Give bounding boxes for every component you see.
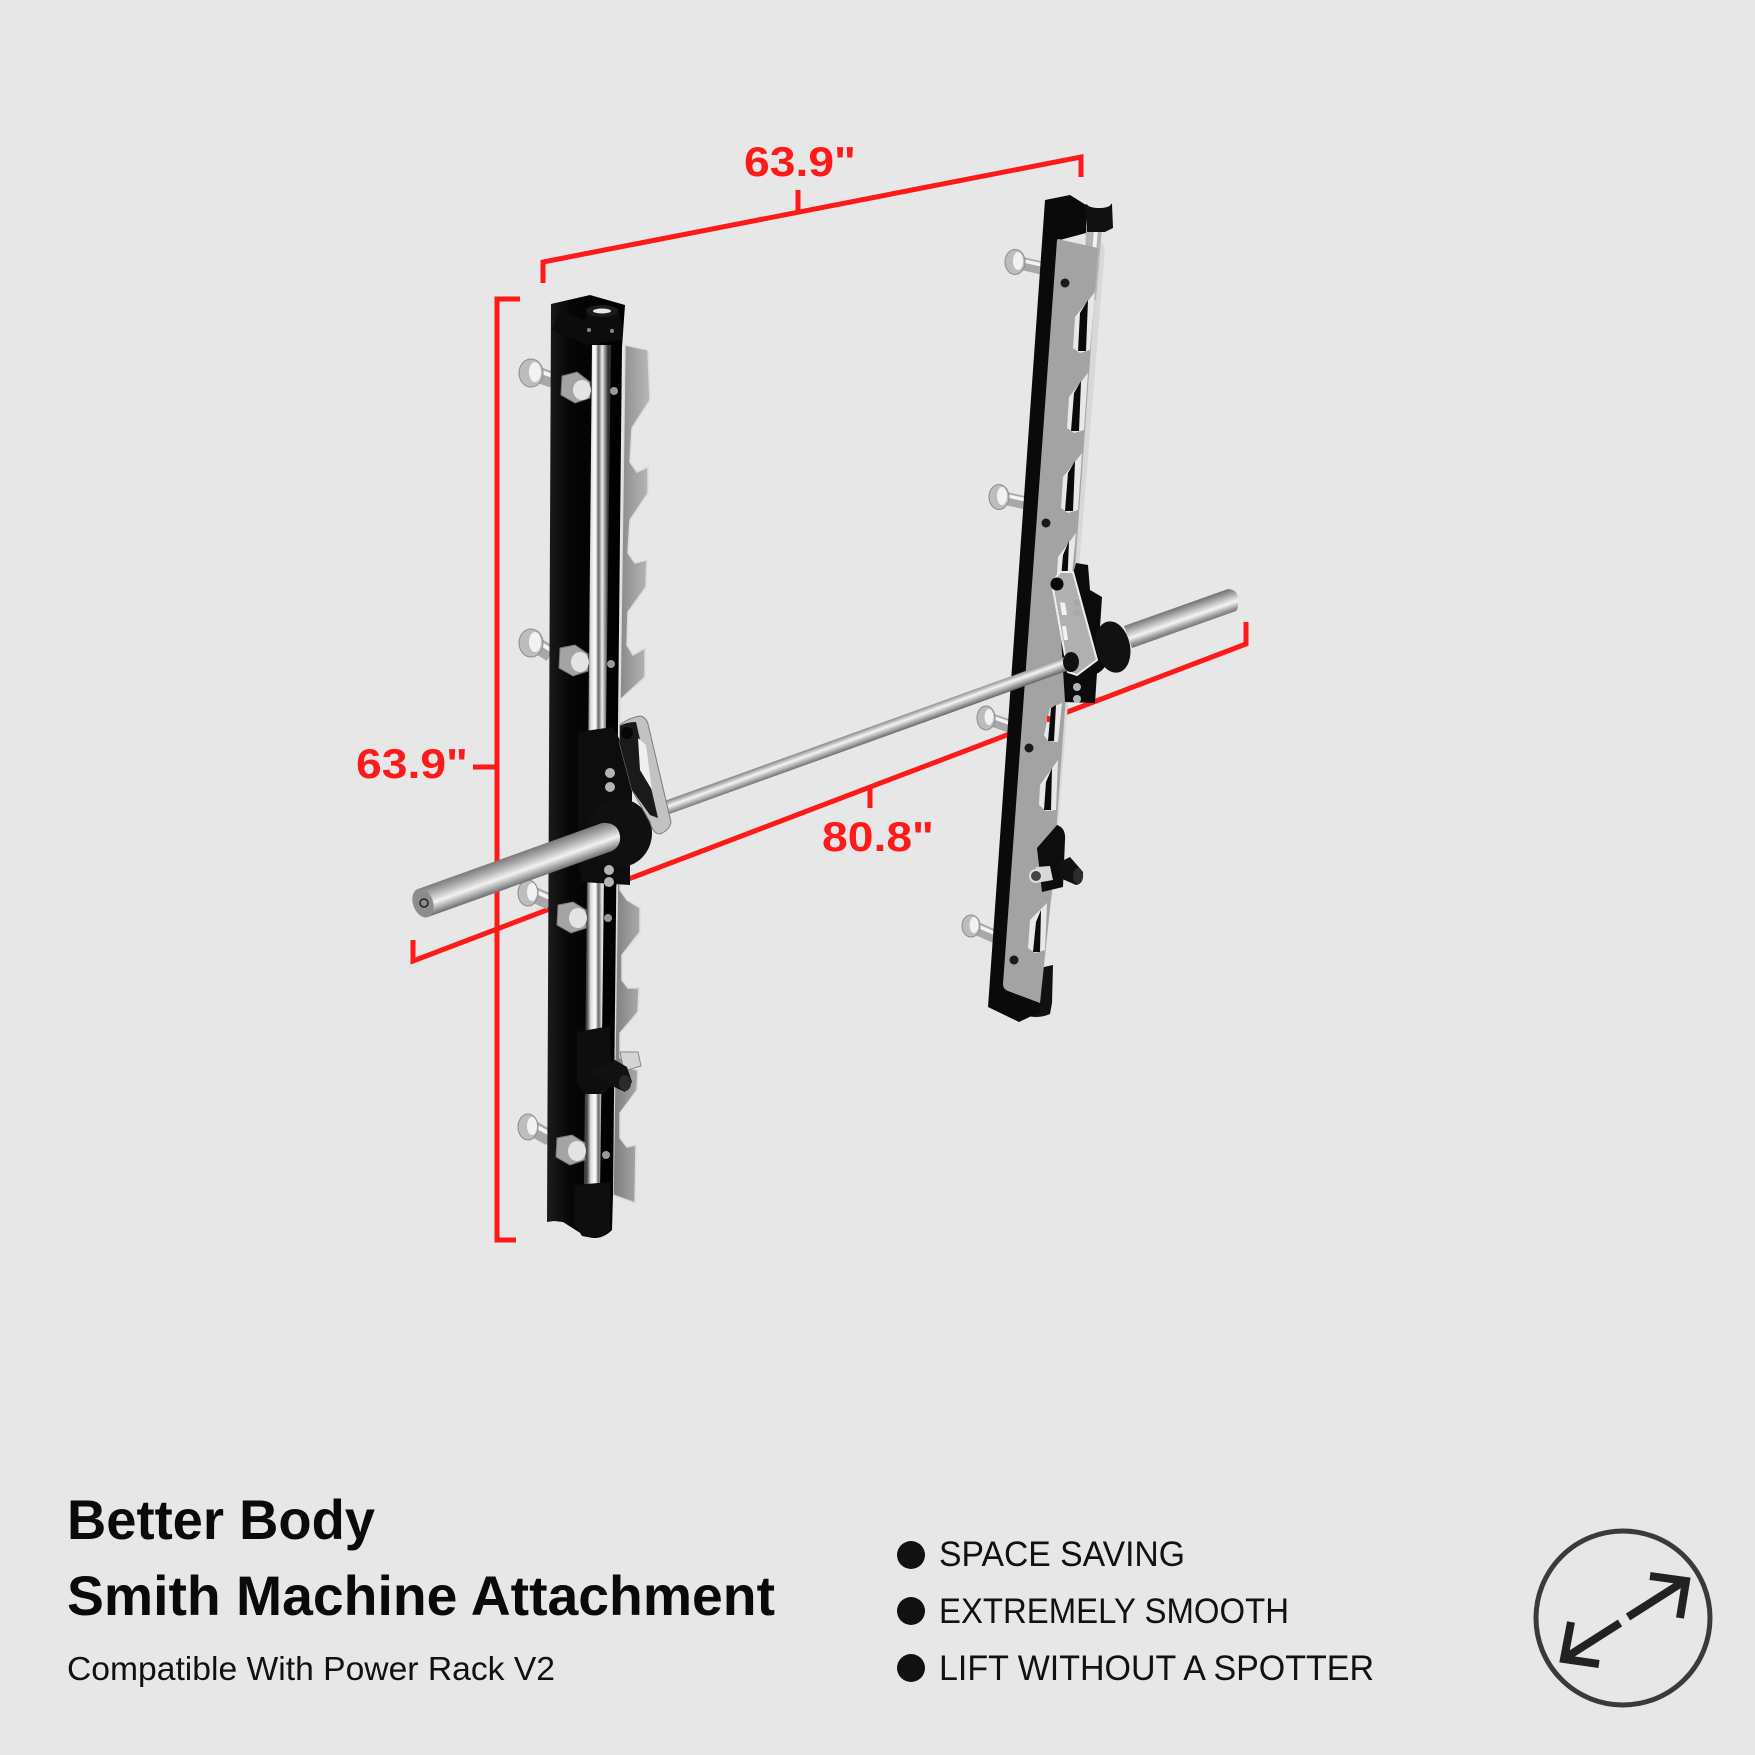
right guide rod: [1044, 230, 1105, 900]
right black rail: [988, 195, 1086, 1022]
title line 2: Smith Machine Attachment: [67, 1564, 775, 1627]
feature: space saving: SPACE SAVING: [939, 1535, 1185, 1574]
left carriage block: [578, 727, 652, 887]
right plate notches: [1028, 292, 1095, 953]
barbell: [656, 589, 1238, 817]
right link plate: [1052, 572, 1097, 675]
right lock carriage: [1030, 825, 1083, 892]
right steel plate: [1003, 239, 1098, 1003]
left guide rod: [584, 345, 611, 1190]
feature: extremely smooth: EXTREMELY SMOOTH: [939, 1592, 1289, 1631]
right collar: [1077, 624, 1117, 678]
left link plate: [620, 716, 671, 834]
right top cap: [1085, 201, 1113, 232]
left mounting bolts: [518, 359, 553, 1140]
bar length bracket: [413, 622, 1246, 961]
left bottom cap: [575, 1182, 610, 1237]
dimension lines: red brackets: [413, 157, 1246, 1240]
dimension label: height: 63.9": [356, 740, 468, 787]
thin bar section: [656, 655, 1075, 817]
right mounting bolts: [962, 250, 1042, 937]
feature list: [897, 1535, 1374, 1688]
icon: diagonal dimension arrows in circle: [1536, 1531, 1710, 1705]
left rail nuts: [556, 372, 618, 1165]
right carriage block: [1060, 563, 1102, 703]
left height bracket: [473, 299, 520, 1240]
left steel plate with notches: [613, 345, 650, 1203]
left lock carriage: [577, 1026, 641, 1094]
right sleeve: [1124, 589, 1238, 648]
right plate bolts: [1010, 278, 1070, 964]
left thick bar sleeve: [408, 823, 620, 921]
subtitle: Compatible With Power Rack V2: [67, 1650, 555, 1687]
right bottom cap: [1022, 965, 1053, 1017]
dimension label: top width: 63.9": [744, 138, 856, 185]
title: [67, 1488, 775, 1627]
top width bracket: [543, 157, 1081, 283]
right upright assembly: [962, 195, 1113, 1022]
left upright assembly: [518, 295, 650, 1238]
dimension label: bar length: 80.8": [822, 813, 934, 860]
left black rail: [547, 295, 625, 1238]
left top cap: [552, 305, 623, 345]
feature: lift without a spotter: LIFT WITHOUT A SPOTTER: [939, 1649, 1374, 1688]
right link plate and collar: [1050, 572, 1135, 703]
red line seen through slot: [1047, 716, 1050, 722]
title line 1: Better Body: [67, 1488, 375, 1551]
